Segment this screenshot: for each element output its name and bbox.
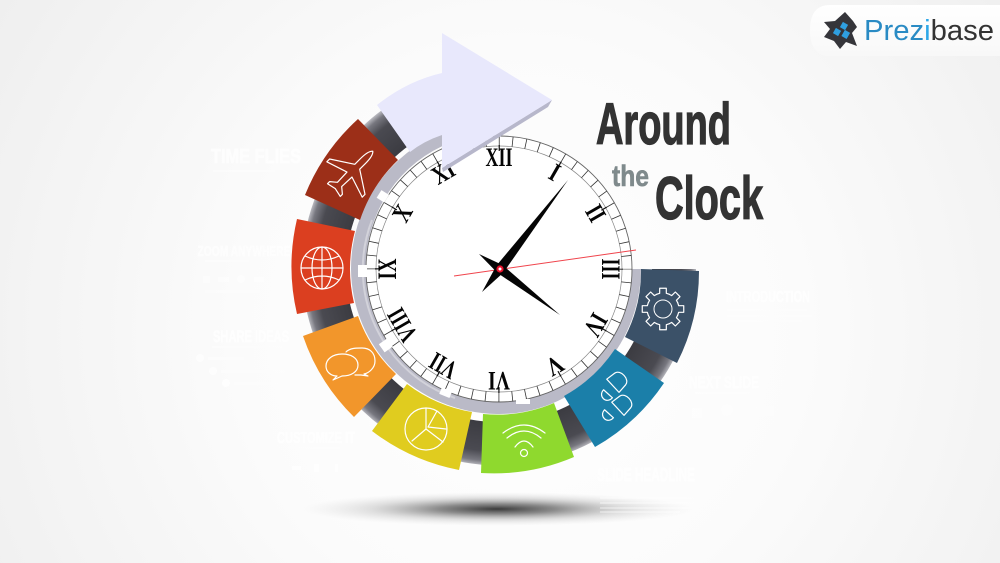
grey clock rim bbox=[351, 131, 641, 414]
icon: pie chart bbox=[405, 408, 447, 450]
tile: gear bbox=[625, 269, 699, 363]
faint label: slide headline: SLIDE HEADLINE bbox=[597, 465, 695, 485]
logo wordmark: Prezibase bbox=[864, 15, 994, 47]
faint label: next slide: NEXT SLIDE bbox=[689, 373, 759, 392]
faint label: share ideas bbox=[196, 327, 289, 387]
roman numerals: X bbox=[386, 199, 419, 227]
title: Clock bbox=[655, 165, 763, 232]
tile: globe bbox=[292, 219, 355, 314]
roman numerals: VI bbox=[488, 366, 510, 395]
icon: globe bbox=[301, 247, 343, 289]
roman numerals: III bbox=[596, 258, 625, 280]
tile: wifi bbox=[481, 403, 574, 473]
faint label: share ideas: SHARE IDEAS bbox=[213, 327, 289, 346]
icon: gear bbox=[642, 288, 684, 330]
tile: footsteps bbox=[564, 349, 664, 447]
clock face bbox=[366, 136, 632, 402]
hub bbox=[496, 265, 504, 273]
icon: wifi bbox=[503, 425, 545, 456]
title: Around bbox=[596, 92, 731, 157]
roman numerals: XII bbox=[486, 143, 512, 172]
roman numerals bbox=[373, 143, 625, 395]
logo icon bbox=[824, 12, 857, 49]
icon: airplane bbox=[316, 134, 390, 208]
icon: chat bubbles bbox=[326, 348, 375, 380]
logo: prezibase bbox=[810, 5, 1000, 56]
faint label: customize it: CUSTOMIZE IT bbox=[277, 430, 355, 447]
ground shadow bbox=[302, 492, 692, 526]
tile: pie chart bbox=[372, 384, 472, 470]
faint label: zoom anywhere bbox=[198, 243, 290, 293]
second hand bbox=[454, 250, 636, 276]
roman numerals: IV bbox=[577, 308, 614, 342]
roman numerals: IX bbox=[373, 258, 402, 280]
faint label: customize it bbox=[277, 430, 355, 472]
roman numerals: VII bbox=[424, 346, 462, 385]
roman numerals: V bbox=[540, 349, 569, 382]
faint label: introduction: INTRODUCTION bbox=[726, 289, 810, 306]
roman numerals: II bbox=[579, 200, 612, 227]
minute tick ring bbox=[366, 136, 632, 402]
faint label: zoom anywhere: ZOOM ANYWHERE bbox=[198, 243, 290, 260]
faint label: next slide bbox=[689, 373, 774, 418]
rim highlights bbox=[358, 190, 530, 404]
roman numerals: I bbox=[544, 158, 565, 187]
arrow bbox=[377, 33, 552, 172]
roman numerals: VIII bbox=[381, 303, 423, 347]
faint label: introduction bbox=[726, 289, 812, 322]
faint label: slide headline bbox=[597, 465, 695, 513]
title bbox=[596, 92, 763, 232]
minute hand bbox=[482, 180, 568, 292]
tile: plane bbox=[305, 119, 398, 220]
hour hand bbox=[479, 254, 560, 315]
faint label: time flies: TIME FLIES bbox=[211, 146, 301, 168]
dark ring band behind tiles bbox=[302, 88, 696, 465]
icon: footsteps bbox=[599, 369, 635, 423]
title: the bbox=[612, 160, 649, 193]
tile: speech bubbles bbox=[303, 316, 396, 417]
roman numerals: XI bbox=[426, 154, 460, 190]
clock hands bbox=[454, 180, 636, 315]
